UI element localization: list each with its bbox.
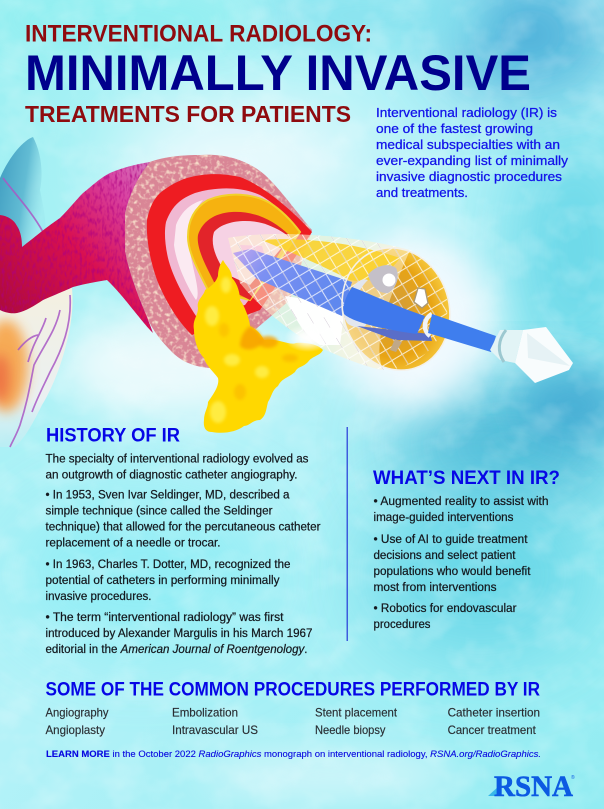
history text: • The term “interventional radiology” was first — [46, 610, 284, 624]
procedures list: Catheter insertion — [448, 706, 540, 720]
intro text: and treatments. — [376, 185, 468, 200]
learn more line: LEARN MORE in the October 2022 RadioGraphics monograph on interventional radiology, RSNA.org/RadioGraphics. — [46, 749, 541, 760]
history text: invasive procedures. — [46, 589, 152, 603]
heading: history: HISTORY OF IR — [46, 426, 180, 447]
what's next text — [374, 494, 549, 631]
procedures list: Intravascular US — [172, 723, 258, 737]
what's next text: • Robotics for endovascular — [374, 601, 516, 615]
panel: history of IR — [46, 426, 320, 656]
procedures list: Needle biopsy — [315, 723, 386, 737]
stent mouth — [326, 234, 466, 384]
title line 3: TREATMENTS FOR PATIENTS — [25, 101, 351, 127]
procedures list: Stent placement — [315, 706, 398, 720]
history text: • In 1963, Charles T. Dotter, MD, recognized the — [46, 557, 291, 571]
history text: an outgrowth of diagnostic catheter angiography. — [46, 468, 298, 482]
title line 1: INTERVENTIONAL RADIOLOGY: — [25, 20, 372, 48]
RSNA logo: RSNA — [494, 770, 573, 803]
history text — [46, 452, 320, 656]
yellow ring — [188, 195, 300, 300]
intro text: ever-expanding list of minimally — [376, 153, 568, 168]
procedures list: Angiography — [46, 706, 108, 720]
panel: what's next in IR — [373, 468, 560, 631]
blood vessel tube — [0, 162, 153, 333]
organ at left edge — [0, 137, 73, 447]
valve clips — [344, 265, 432, 352]
procedures list — [46, 706, 540, 737]
heading: what's next: WHAT’S NEXT IN IR? — [373, 468, 560, 489]
illustration: vessel, stent and catheter — [0, 137, 573, 447]
stent body fill — [228, 234, 410, 370]
procedures list: Cancer treatment — [448, 723, 536, 737]
panel: common procedures — [46, 680, 540, 737]
catheter thick segment — [343, 287, 425, 334]
what's next text: populations who would benefit — [374, 564, 531, 578]
catheter thin segment — [428, 314, 496, 352]
RSNA logo: ® — [571, 774, 575, 781]
vessel pink lining — [165, 188, 298, 316]
inner vessel core — [198, 212, 290, 300]
what's next text: • Augmented reality to assist with — [374, 494, 549, 508]
intro text — [376, 105, 568, 200]
history text: simple technique (since called the Seldinger — [46, 504, 272, 518]
catheter collar — [425, 314, 432, 336]
what's next text: decisions and select patient — [374, 548, 516, 562]
history text: introduced by Alexander Margulis in his March 1967 — [46, 626, 313, 640]
procedures list: Angioplasty — [46, 723, 105, 737]
history text: editorial in the American Journal of Roentgenology. — [46, 642, 308, 656]
what's next text: procedures — [374, 617, 430, 631]
intro text: Interventional radiology (IR) is — [376, 105, 557, 120]
yellow plaque — [194, 260, 323, 433]
vessel cut wall — [125, 155, 312, 368]
catheter tip — [490, 327, 573, 383]
history text: potential of catheters in performing minimally — [46, 573, 280, 587]
procedures list: Embolization — [172, 706, 238, 720]
what's next text: image-guided interventions — [374, 510, 514, 524]
title — [25, 20, 531, 127]
history text: • In 1953, Sven Ivar Seldinger, MD, described a — [46, 488, 290, 502]
what's next text: • Use of AI to guide treatment — [374, 532, 528, 546]
heading: procedures: SOME OF THE COMMON PROCEDURES PERFORMED BY IR — [46, 680, 540, 701]
intro text: one of the fastest growing — [376, 121, 533, 136]
light flare — [284, 324, 332, 352]
history text: The specialty of interventional radiology evolved as — [46, 452, 308, 466]
vessel red inner ring — [147, 174, 312, 335]
title line 2: MINIMALLY INVASIVE — [25, 45, 531, 101]
stent mesh — [230, 234, 448, 370]
intro text: medical subspecialties with an — [376, 137, 560, 152]
history text: replacement of a needle or trocar. — [46, 536, 220, 550]
what's next text: most from interventions — [374, 580, 496, 594]
history text: technique) that allowed for the percutaneous catheter — [46, 520, 320, 534]
catheter inside stent — [233, 249, 352, 316]
stent rim — [326, 234, 466, 384]
intro text: invasive diagnostic procedures — [376, 169, 562, 184]
